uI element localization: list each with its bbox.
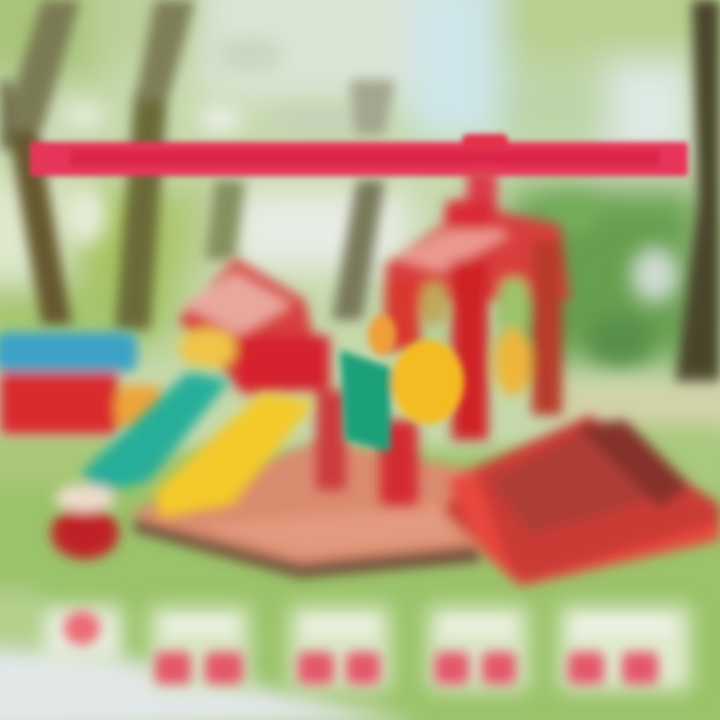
right tower: red arch structure [385,170,570,440]
card 2 [150,606,250,690]
ramp: red climbing net [445,415,720,586]
left toy: blue-roofed red block [0,332,165,434]
lower pale strip [0,645,420,720]
playground deck [130,440,480,578]
card 5 [560,606,690,690]
slides: teal and yellow [51,372,315,559]
left tower: red house [178,258,418,505]
card 4 [428,606,528,690]
card 1 [42,606,122,662]
info cards row [42,606,690,690]
background: park foliage [0,0,720,446]
green panel and yellow ball [340,315,464,452]
tree trunks [0,0,720,385]
ground: grass lawn [0,385,720,720]
banner: red title ribbon [30,134,688,176]
card 3 [290,606,390,690]
